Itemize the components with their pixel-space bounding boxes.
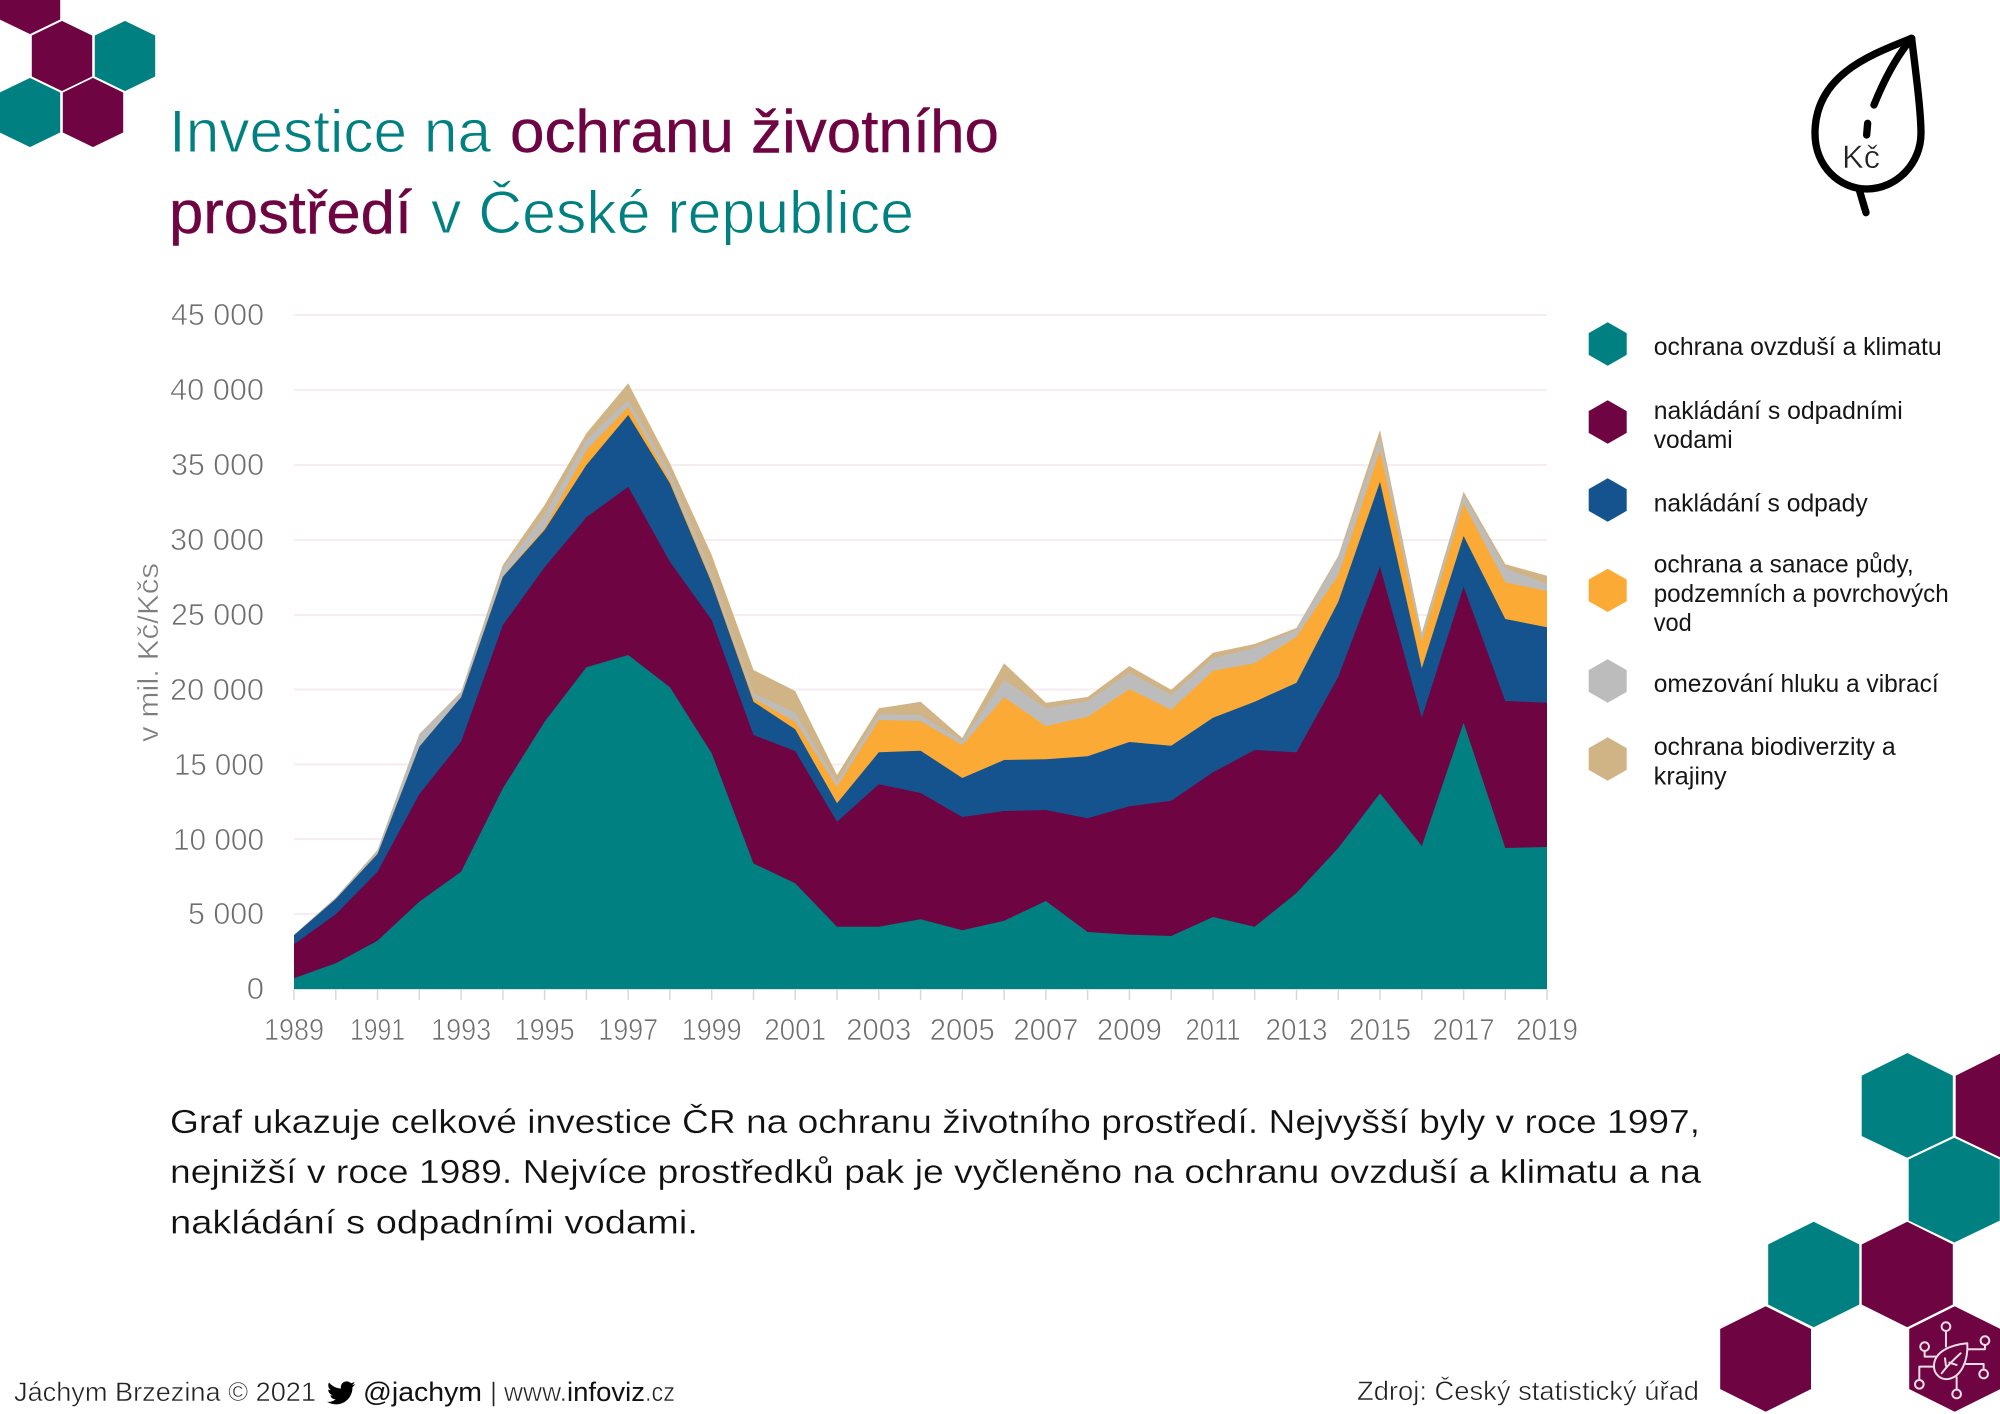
legend item: nakládání s odpadními vodami <box>1589 397 1903 454</box>
icon: leaf with circuit nodes <box>1915 1322 1989 1398</box>
legend item: ochrana biodiverzity a krajiny <box>1589 733 1896 790</box>
legend <box>1589 322 1949 790</box>
body text: nakládání s odpadními vodami. <box>170 1204 698 1240</box>
x axis labels: 2001 <box>764 1012 826 1047</box>
x axis labels: 2003 <box>846 1012 911 1047</box>
x axis labels: 2005 <box>930 1012 995 1047</box>
x axis labels: 2019 <box>1516 1012 1578 1047</box>
decoration: bottom-right hexagons <box>1720 1052 2000 1412</box>
y axis labels: 35 000 <box>171 447 264 482</box>
title <box>169 98 999 246</box>
x axis labels: 2017 <box>1433 1012 1495 1047</box>
footer: author and links <box>14 1377 675 1407</box>
source: Zdroj: Český statistický úřad <box>1357 1375 1699 1406</box>
legend item: nakládání s odpadními vodami: vodami <box>1654 426 1733 454</box>
title: prostředí <box>169 179 412 246</box>
body text: nejnižší v roce 1989. Nejvíce prostředků pak je vyčleněno na ochranu ovzduší a klimatu a na <box>170 1153 1702 1190</box>
area: ochrana ovzduší a klimatu <box>294 655 1547 989</box>
x axis labels: 2013 <box>1266 1012 1328 1047</box>
y axis labels: 40 000 <box>170 372 264 407</box>
legend item: ochrana biodiverzity a krajiny: krajiny <box>1654 762 1727 790</box>
title: Investice na <box>169 98 492 165</box>
y axis labels: 25 000 <box>171 597 264 632</box>
icon: leaf with Kč: Kč <box>1842 139 1880 175</box>
legend item: nakládání s odpady: nakládání s odpady <box>1654 490 1868 518</box>
area: omezování hluku a vibrací <box>294 400 1547 989</box>
y axis labels <box>170 297 264 1006</box>
decoration: top-left hexagons <box>0 0 156 148</box>
y axis labels: 5 000 <box>188 896 264 931</box>
legend item: nakládání s odpady <box>1589 478 1868 522</box>
area: nakládání s odpady <box>294 415 1547 989</box>
x axis labels: 2007 <box>1013 1012 1078 1047</box>
y axis labels: 10 000 <box>173 822 264 857</box>
legend item: ochrana a sanace půdy, podzemních a povrchových vod: ochrana a sanace půdy, <box>1654 550 1914 578</box>
y axis gridlines <box>294 315 1547 914</box>
x axis labels: 1993 <box>431 1012 491 1047</box>
x axis labels: 2011 <box>1186 1012 1240 1047</box>
x axis labels: 1989 <box>264 1012 324 1047</box>
y axis labels: 45 000 <box>171 297 264 332</box>
footer: author and links: | <box>490 1377 497 1407</box>
title: ochranu životního <box>510 98 999 165</box>
legend item: omezování hluku a vibrací <box>1589 659 1939 703</box>
legend item: ochrana ovzduší a klimatu: ochrana ovzduší a klimatu <box>1654 333 1942 361</box>
x axis labels: 1991 <box>350 1012 405 1047</box>
y axis labels: 20 000 <box>170 672 264 707</box>
legend item: ochrana a sanace půdy, podzemních a povrchových vod: podzemních a povrchových <box>1654 580 1949 608</box>
legend item: omezování hluku a vibrací: omezování hluku a vibrací <box>1654 670 1939 698</box>
legend item: ochrana ovzduší a klimatu <box>1589 322 1942 366</box>
footer: author and links: @jachym <box>363 1377 482 1407</box>
x axis line and ticks <box>294 989 1547 1000</box>
footer: author and links: .cz <box>645 1377 675 1407</box>
area: nakládání s odpadními vodami <box>294 487 1547 989</box>
x axis labels: 1995 <box>515 1012 575 1047</box>
y axis title: v mil. Kč/Kčs <box>133 563 165 742</box>
x axis labels: 2015 <box>1349 1012 1411 1047</box>
x axis labels: 1997 <box>598 1012 658 1047</box>
area: ochrana biodiverzity a krajiny <box>294 383 1547 989</box>
footer: author and links: infoviz <box>567 1377 645 1407</box>
footer: author and links: www. <box>503 1377 567 1407</box>
legend item: ochrana a sanace půdy, podzemních a povrchových vod: vod <box>1654 609 1692 637</box>
footer: author and links: Jáchym Brzezina © 2021 <box>14 1377 316 1407</box>
chart: stacked area of investments 1989–2019 <box>133 297 1578 1047</box>
legend item: ochrana a sanace půdy, podzemních a povrchových vod <box>1589 550 1949 637</box>
body text <box>170 1103 1702 1240</box>
x axis labels: 1999 <box>682 1012 742 1047</box>
legend item: nakládání s odpadními vodami: nakládání s odpadními <box>1654 397 1903 425</box>
area: ochrana a sanace půdy, podzemních a povrchových vod <box>294 407 1547 989</box>
body text: Graf ukazuje celkové investice ČR na ochranu životního prostředí. Nejvyšší byly v roce 1997, <box>170 1103 1700 1140</box>
y axis labels: 30 000 <box>170 522 264 557</box>
icon: leaf with Kč <box>1815 38 1921 213</box>
title: v České republice <box>431 179 914 246</box>
y axis labels: 0 <box>247 971 264 1006</box>
x axis labels: 2009 <box>1097 1012 1162 1047</box>
icon: twitter bird <box>327 1381 355 1404</box>
y axis labels: 15 000 <box>174 747 264 782</box>
x axis labels <box>264 1012 1578 1047</box>
legend item: ochrana biodiverzity a krajiny: ochrana biodiverzity a <box>1654 733 1896 761</box>
